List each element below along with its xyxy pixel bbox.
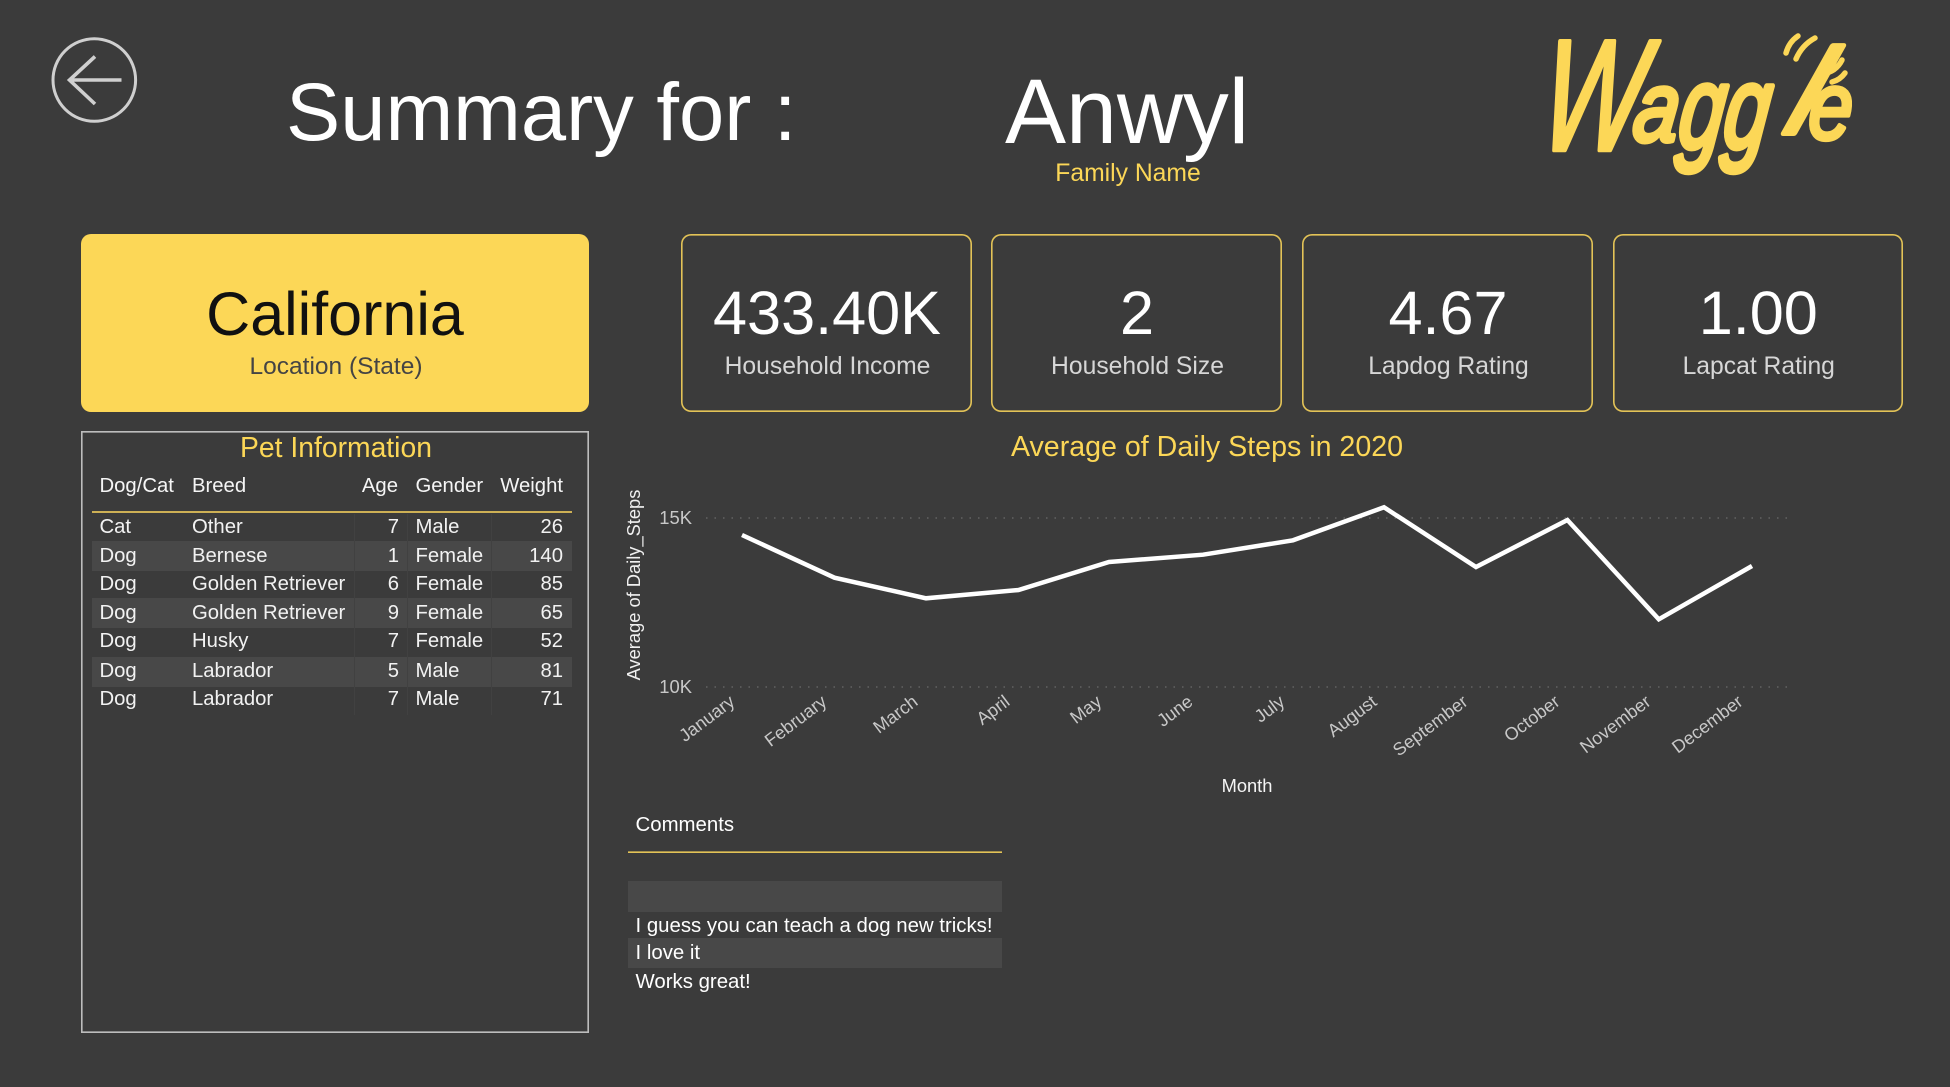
- x axis month labels: September: [1389, 691, 1471, 760]
- table: pets: [92, 475, 572, 710]
- x axis title: Month: [1222, 775, 1272, 796]
- title: summary heading: Summary for :: [286, 67, 796, 158]
- line chart: average daily steps by month: [623, 490, 1787, 796]
- comment row: [628, 938, 1002, 968]
- x axis month labels: October: [1500, 691, 1563, 746]
- y axis labels: 10K: [659, 676, 693, 697]
- row: dog labrador age 7: 7: [388, 688, 399, 710]
- row: cat other: Male: [416, 516, 459, 538]
- row: dog husky: Dog: [100, 630, 137, 652]
- row: dog labrador age 7: [100, 688, 563, 710]
- KPI value: 4.67: [1388, 279, 1508, 347]
- table header row: Age: [362, 475, 398, 497]
- x axis month labels: February: [761, 691, 830, 751]
- table header row: Dog/Cat: [100, 475, 174, 497]
- icon: back arrow button: [52, 37, 138, 123]
- logo: Waggle: gg: [1673, 43, 1779, 173]
- row: dog labrador age 5: 81: [540, 660, 563, 682]
- row: dog labrador age 5: [92, 657, 572, 687]
- x axis month labels: April: [973, 691, 1013, 729]
- KPI value: 1.00: [1699, 279, 1818, 347]
- x axis month labels: January: [675, 691, 738, 746]
- row: dog golden retriever age 9: Dog: [100, 602, 137, 624]
- y axis title: Average of Daily_Steps: [623, 490, 645, 680]
- table header row: Breed: [192, 475, 246, 497]
- row: dog labrador age 7: Dog: [100, 688, 137, 710]
- comment row: I love it: [636, 942, 700, 964]
- x axis month labels: December: [1668, 691, 1746, 757]
- row: dog golden retriever age 9: Golden Retriever: [192, 602, 345, 624]
- row: dog labrador age 7: 71: [540, 688, 563, 710]
- row: dog husky: 7: [388, 630, 399, 652]
- row: dog husky: Husky: [192, 630, 248, 652]
- logo: Waggle: l: [1772, 26, 1851, 159]
- row: dog golden retriever age 6: 6: [388, 573, 399, 595]
- row: dog golden retriever age 6: Female: [416, 573, 483, 595]
- row: cat other: [100, 516, 563, 538]
- row: dog husky: [100, 630, 563, 652]
- y axis labels: [659, 507, 693, 697]
- x axis month labels: November: [1576, 691, 1654, 757]
- x axis month labels: May: [1066, 691, 1105, 728]
- row: dog labrador age 7: Labrador: [192, 688, 273, 710]
- x axis month labels: August: [1324, 691, 1380, 741]
- y axis labels: 15K: [659, 507, 693, 528]
- x axis month labels: July: [1251, 691, 1288, 726]
- KPI label: Lapdog Rating: [1368, 353, 1529, 380]
- row: dog golden retriever age 6: [100, 573, 563, 595]
- state value: California: [206, 280, 464, 348]
- panel: comments table: [628, 814, 1002, 993]
- KPI value: 433.40K: [713, 279, 941, 347]
- logo: Waggle: a: [1628, 53, 1687, 163]
- comments header: Comments: [636, 814, 734, 836]
- panel: lapcat rating KPI: [1612, 234, 1903, 412]
- table header row: Gender: [416, 475, 483, 497]
- x axis month labels: [675, 691, 1746, 760]
- panel: pet information: [81, 431, 589, 1033]
- row: cat other: 7: [388, 516, 399, 538]
- x axis month labels: June: [1153, 691, 1196, 731]
- row: dog bernese: Dog: [100, 545, 137, 567]
- KPI label: Household Income: [725, 353, 930, 380]
- row: dog labrador age 5: Male: [416, 660, 459, 682]
- row: dog bernese: Female: [416, 545, 483, 567]
- comment row: I guess you can teach a dog new tricks!: [636, 915, 993, 937]
- row: dog bernese: 1: [388, 545, 399, 567]
- blank comment row: [628, 881, 1002, 912]
- row: dog golden retriever age 6: Golden Retriever: [192, 573, 345, 595]
- panel: household income KPI: [681, 234, 972, 412]
- x axis month labels: March: [869, 691, 921, 737]
- table header row: [92, 471, 572, 513]
- comment row: Works great!: [636, 971, 751, 993]
- row: dog labrador age 5: 5: [388, 660, 399, 682]
- logo: Waggle: [1545, 25, 1857, 184]
- panel: state location card: [81, 234, 589, 412]
- row: dog husky: Female: [416, 630, 483, 652]
- panel: household size KPI: [991, 234, 1282, 412]
- panel: lapdog rating KPI: [1302, 234, 1593, 412]
- KPI label: Lapcat Rating: [1683, 353, 1835, 380]
- row: cat other: 26: [540, 516, 563, 538]
- row: dog golden retriever age 9: 65: [540, 602, 563, 624]
- chart heading: Average of Daily Steps in 2020: [1011, 431, 1403, 463]
- row: dog golden retriever age 9: Female: [416, 602, 483, 624]
- comments header: [628, 810, 1002, 853]
- row: dog bernese: [92, 541, 572, 571]
- row: dog bernese: 140: [529, 545, 563, 567]
- logo: Waggle: e: [1806, 52, 1857, 160]
- row: dog labrador age 5: Dog: [100, 660, 137, 682]
- table header row: Weight: [500, 475, 563, 497]
- data line: [742, 507, 1752, 619]
- state label: Location (State): [250, 353, 422, 380]
- KPI value: 2: [1120, 279, 1154, 347]
- row: dog golden retriever age 6: 85: [540, 573, 563, 595]
- row: dog golden retriever age 9: 9: [388, 602, 399, 624]
- row: dog labrador age 5: Labrador: [192, 660, 273, 682]
- family name label: Family Name: [1055, 160, 1201, 187]
- family name value: Anwyl: [1005, 61, 1249, 163]
- KPI label: Household Size: [1051, 353, 1224, 380]
- row: cat other: Other: [192, 516, 243, 538]
- pet information heading: Pet Information: [240, 431, 432, 463]
- row: dog golden retriever age 6: Dog: [100, 573, 137, 595]
- row: dog golden retriever age 9: [92, 598, 572, 628]
- row: cat other: Cat: [100, 516, 131, 538]
- row: dog bernese: Bernese: [192, 545, 268, 567]
- row: dog labrador age 7: Male: [416, 688, 459, 710]
- row: dog husky: 52: [540, 630, 563, 652]
